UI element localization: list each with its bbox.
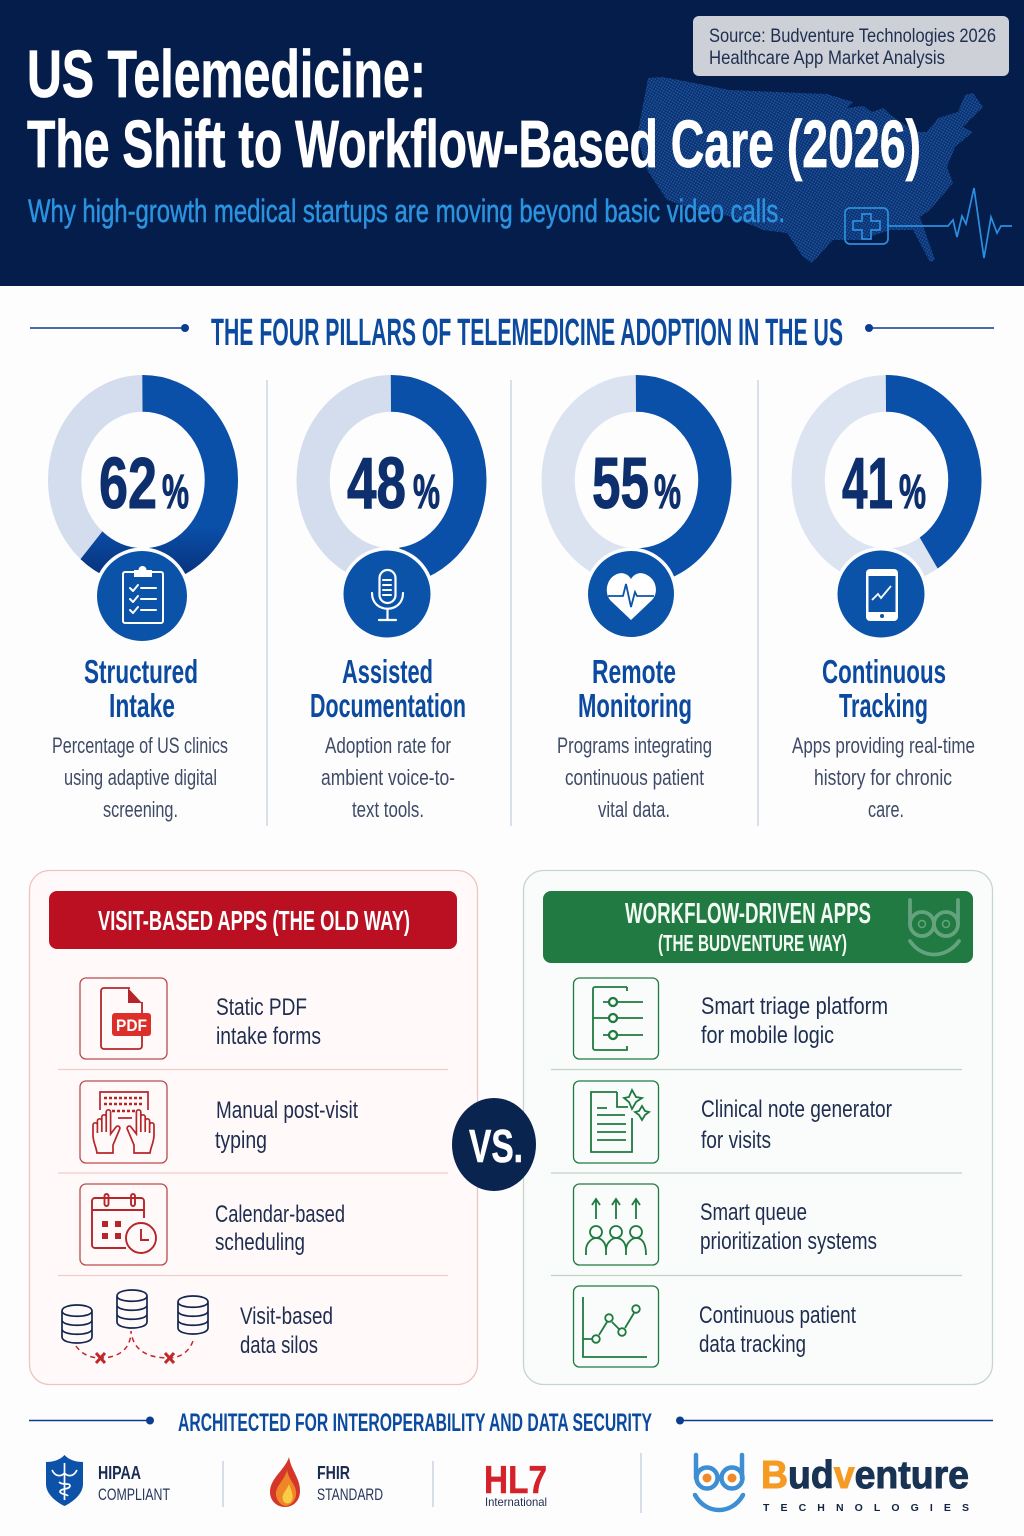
- badge: FHIR: [270, 1457, 383, 1507]
- section heading: interoperability: ARCHITECTED FOR INTEROPERABILITY AND DATA SECURITY: [178, 1409, 652, 1437]
- pillar description: history for chronic: [814, 765, 952, 790]
- logo: Budventure Technologies: TECHNOLOGIES: [763, 1502, 969, 1514]
- badge: HL7: International: [485, 1495, 547, 1509]
- row: patient tracking: Continuous patient: [699, 1302, 856, 1329]
- row: smart triage: [574, 978, 888, 1059]
- logo: Budventure Technologies: Budventure: [761, 1454, 969, 1497]
- source box: [693, 16, 1009, 76]
- panel header: [543, 891, 973, 963]
- percentage 62: %: [162, 466, 189, 519]
- row: data silos: Visit-based: [240, 1303, 333, 1330]
- title: [27, 37, 921, 182]
- pillar 2: assisted documentation: [310, 393, 470, 822]
- row: smart triage: for mobile logic: [701, 1022, 834, 1049]
- percentage 62: 62: [99, 444, 157, 524]
- row: calendar scheduling: Calendar-based: [215, 1201, 345, 1228]
- percentage 48: %: [413, 466, 440, 519]
- row: data silos: data silos: [240, 1332, 318, 1359]
- row: smart queue: prioritization systems: [700, 1228, 877, 1255]
- pillar description: Apps providing real-time: [792, 733, 975, 758]
- row: static PDF: Static PDF: [216, 994, 307, 1021]
- pillar title: Structured: [84, 653, 198, 690]
- pillar title: Monitoring: [578, 687, 692, 724]
- row: smart triage: Smart triage platform: [701, 993, 888, 1020]
- percentage 48: 48: [347, 444, 406, 524]
- percentage 55: 55: [592, 444, 649, 524]
- percentage 41: %: [899, 466, 926, 519]
- row: note generator: [574, 1081, 892, 1163]
- icon: bd watermark: [910, 900, 959, 954]
- pillar description: text tools.: [352, 797, 424, 822]
- row: note generator: Clinical note generator: [701, 1096, 892, 1123]
- logo: Budventure Technologies: [695, 1454, 969, 1514]
- pillar 3: remote monitoring: [557, 393, 715, 822]
- row: smart queue: Smart queue: [700, 1199, 807, 1226]
- row: calendar scheduling: scheduling: [215, 1229, 305, 1256]
- pillar title: Documentation: [310, 687, 466, 724]
- icon: medical cross with heartbeat line: [845, 188, 1012, 258]
- pillar description: Percentage of US clinics: [52, 733, 228, 758]
- pillar description: Adoption rate for: [325, 733, 451, 758]
- donut chart 62%: [65, 393, 221, 567]
- pillar description: ambient voice-to-: [321, 765, 455, 790]
- row: manual typing: Manual post-visit: [216, 1097, 358, 1124]
- pillar description: care.: [868, 797, 904, 822]
- row: static PDF: PDF: [116, 1016, 147, 1035]
- VS badge: VS.: [469, 1120, 523, 1172]
- pillar title: [310, 653, 466, 724]
- panel header: VISIT-BASED APPS (THE OLD WAY): [98, 905, 410, 936]
- pillar description: [52, 733, 228, 822]
- panel: visit-based apps: [30, 870, 478, 1384]
- pillar description: [557, 733, 712, 822]
- row: smart queue: [574, 1184, 877, 1265]
- donut chart 55%: [558, 393, 715, 567]
- row: note generator: for visits: [701, 1127, 771, 1154]
- badge: HIPAA: COMPLIANT: [98, 1485, 170, 1504]
- VS badge: [452, 1098, 536, 1191]
- pillar description: vital data.: [598, 797, 670, 822]
- donut chart 41%: [808, 393, 965, 567]
- badge: HL7: HL7: [484, 1459, 547, 1502]
- badge: FHIR: FHIR: [317, 1463, 350, 1483]
- row: data silos: [62, 1290, 333, 1363]
- row: calendar scheduling: [80, 1184, 345, 1265]
- row: patient tracking: [574, 1286, 856, 1367]
- row: static PDF: intake forms: [216, 1023, 321, 1050]
- source box: Healthcare App Market Analysis: [709, 48, 945, 69]
- pillar title: [578, 653, 692, 724]
- badge: HIPAA: [46, 1455, 170, 1506]
- pillar title: Remote: [592, 653, 676, 690]
- pillar title: [822, 653, 946, 724]
- panel: workflow-driven apps: [524, 870, 992, 1384]
- row: manual typing: [80, 1081, 358, 1163]
- pillar description: Programs integrating: [557, 733, 712, 758]
- pillar description: [321, 733, 455, 822]
- pillar description: screening.: [103, 797, 178, 822]
- donut chart 48%: [313, 393, 470, 567]
- badge: FHIR: STANDARD: [317, 1485, 383, 1504]
- pillar description: using adaptive digital: [64, 765, 217, 790]
- icon: clipboard: [94, 548, 190, 644]
- pillar title: [84, 653, 198, 724]
- icon: microphone: [340, 547, 434, 641]
- US dotted map: [637, 77, 983, 263]
- badge: HIPAA: HIPAA: [98, 1463, 141, 1483]
- row: manual typing: typing: [215, 1127, 267, 1154]
- pillar 4: continuous tracking: [792, 393, 975, 822]
- percentage 55: %: [654, 466, 681, 519]
- panel header: (THE BUDVENTURE WAY): [658, 930, 847, 956]
- title: US Telemedicine:: [27, 37, 426, 112]
- pillar 1: structured intake: [52, 393, 228, 822]
- percentage 41: 41: [842, 444, 893, 524]
- header banner: [0, 0, 1024, 286]
- pillar description: continuous patient: [565, 765, 704, 790]
- pillar title: Tracking: [839, 687, 928, 724]
- icon: heart with pulse: [584, 548, 678, 640]
- panel header: [49, 891, 457, 949]
- pillar description: [792, 733, 975, 822]
- icon: phone with chart: [834, 547, 928, 641]
- icon: bd face: [695, 1455, 743, 1510]
- row: patient tracking: data tracking: [699, 1331, 806, 1358]
- subtitle: Why high-growth medical startups are moving beyond basic video calls.: [28, 193, 785, 229]
- pillar title: Continuous: [822, 653, 946, 690]
- pillar title: Assisted: [342, 653, 433, 690]
- panel header: WORKFLOW-DRIVEN APPS: [625, 898, 871, 930]
- pillar title: Intake: [109, 687, 175, 724]
- row: static PDF: [80, 978, 321, 1059]
